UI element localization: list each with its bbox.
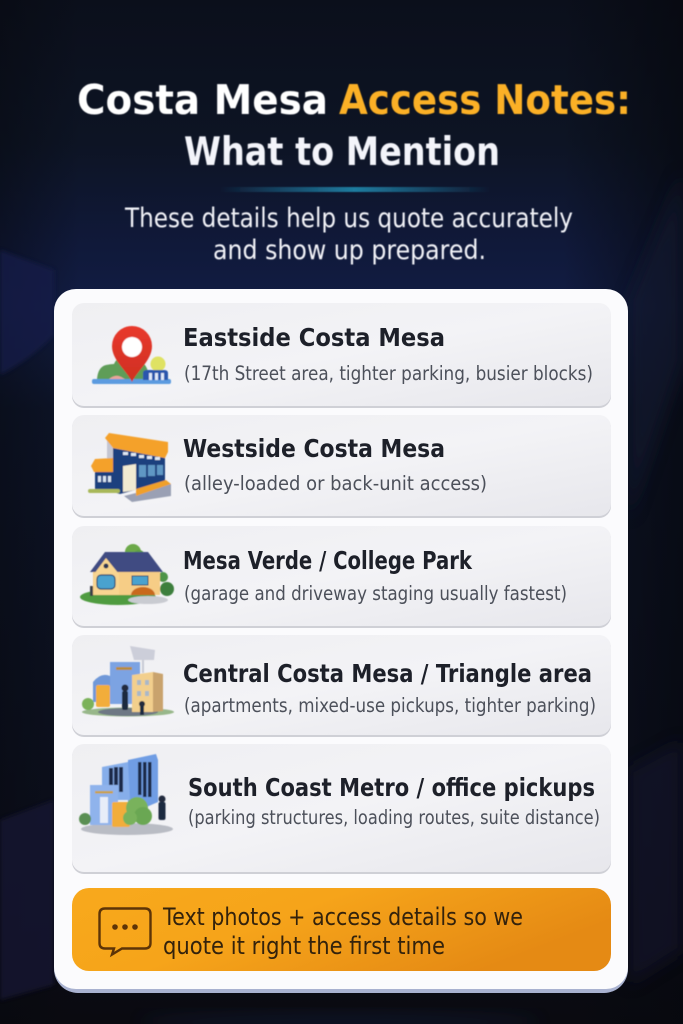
title bbox=[77, 76, 631, 175]
note: (apartments, mixed-use pickups, tighter parking) bbox=[184, 694, 596, 717]
title: What to Mention bbox=[184, 130, 500, 175]
subtitle bbox=[124, 203, 573, 266]
title: Costa Mesa bbox=[77, 76, 328, 124]
callout text bbox=[162, 903, 523, 960]
divider rule bbox=[220, 187, 490, 192]
row: Eastside Costa Mesa bbox=[72, 303, 611, 408]
heading: Mesa Verde / College Park bbox=[183, 546, 473, 575]
icon: speech bubble bbox=[100, 908, 150, 954]
icon: apartments bbox=[82, 646, 174, 716]
title: Access Notes: bbox=[339, 76, 631, 124]
subtitle: These details help us quote accurately bbox=[124, 203, 573, 234]
row: South Coast Metro / office pickups bbox=[72, 744, 611, 874]
row: Westside Costa Mesa bbox=[72, 415, 611, 518]
heading: Eastside Costa Mesa bbox=[183, 323, 445, 352]
row: Central Costa Mesa / Triangle area bbox=[72, 635, 611, 737]
note: (alley-loaded or back-unit access) bbox=[184, 472, 487, 495]
note: (17th Street area, tighter parking, busier blocks) bbox=[184, 362, 593, 385]
icon: alley building bbox=[88, 433, 171, 502]
icon: map pin and park bbox=[92, 326, 171, 384]
icon: house bbox=[80, 544, 174, 605]
panel: main card bbox=[54, 289, 628, 993]
subtitle: and show up prepared. bbox=[213, 235, 486, 266]
heading: Westside Costa Mesa bbox=[183, 434, 445, 463]
icon: office towers bbox=[79, 754, 173, 835]
callout text: quote it right the first time bbox=[163, 932, 445, 960]
heading: South Coast Metro / office pickups bbox=[188, 773, 595, 802]
callout text: Text photos + access details so we bbox=[162, 903, 523, 931]
note: (parking structures, loading routes, suite distance) bbox=[188, 806, 600, 829]
heading: Central Costa Mesa / Triangle area bbox=[183, 659, 592, 688]
callout bbox=[72, 888, 611, 971]
note: (garage and driveway staging usually fastest) bbox=[184, 582, 567, 605]
row: Mesa Verde / College Park bbox=[72, 526, 611, 628]
